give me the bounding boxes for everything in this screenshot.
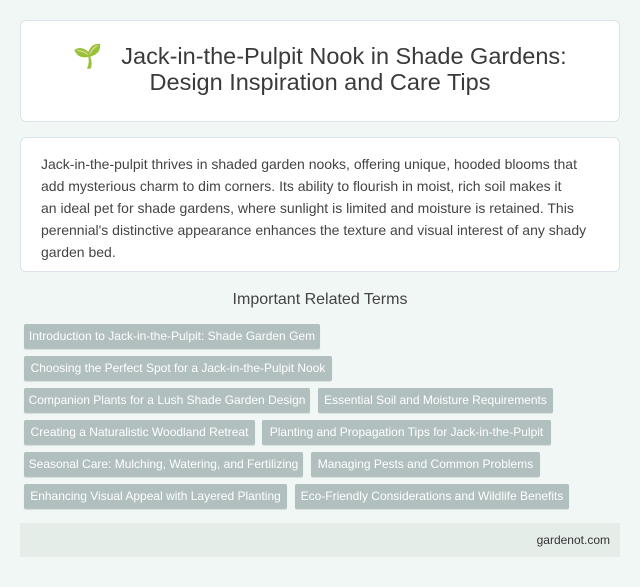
tag 9: Enhancing Visual Appeal with Layered Planting <box>30 489 281 503</box>
tag 1: Introduction to Jack-in-the-Pulpit: Shade Garden Gem <box>29 329 315 343</box>
description text: garden bed. <box>41 244 116 260</box>
tag 7: Seasonal Care: Mulching, Watering, and Fertilizing <box>29 457 298 471</box>
section heading: Important Related Terms <box>233 291 407 308</box>
tag 9 <box>24 484 287 509</box>
description text <box>41 156 586 260</box>
tag 7 <box>24 452 303 477</box>
title: Design Inspiration and Care Tips <box>150 69 490 95</box>
header panel <box>20 20 620 122</box>
icon: seedling: 🌱 <box>73 43 103 69</box>
tag 5 <box>24 420 255 445</box>
tag 4: Essential Soil and Moisture Requirements <box>324 393 547 407</box>
description text: add mysterious charm to dim corners. Its ability to flourish in moist, rich soil makes it <box>41 178 562 194</box>
tag 8 <box>311 452 540 477</box>
tag 6 <box>262 420 551 445</box>
tag 3: Companion Plants for a Lush Shade Garden Design <box>29 393 305 407</box>
description text: an ideal pet for shade gardens, where sunlight is limited and moisture is retained. This <box>41 200 574 216</box>
description text: perennial's distinctive appearance enhances the texture and visual interest of any shady <box>41 222 586 238</box>
tag 3 <box>24 388 310 413</box>
tag 10 <box>295 484 569 509</box>
footer <box>20 523 620 557</box>
tag 4 <box>318 388 553 413</box>
title: Jack-in-the-Pulpit Nook in Shade Gardens: <box>121 43 567 69</box>
tag 1 <box>24 324 320 349</box>
description panel <box>20 137 620 272</box>
title <box>73 43 567 95</box>
tag 8: Managing Pests and Common Problems <box>318 457 533 471</box>
tag 2 <box>24 356 332 381</box>
description text: Jack-in-the-pulpit thrives in shaded garden nooks, offering unique, hooded blooms that <box>41 156 577 172</box>
footer text: gardenot.com <box>537 533 610 547</box>
tag 5: Creating a Naturalistic Woodland Retreat <box>31 425 248 439</box>
tag 2: Choosing the Perfect Spot for a Jack-in-the-Pulpit Nook <box>31 361 325 375</box>
tag 6: Planting and Propagation Tips for Jack-in-the-Pulpit <box>270 425 543 439</box>
tag 10: Eco-Friendly Considerations and Wildlife Benefits <box>301 489 563 503</box>
